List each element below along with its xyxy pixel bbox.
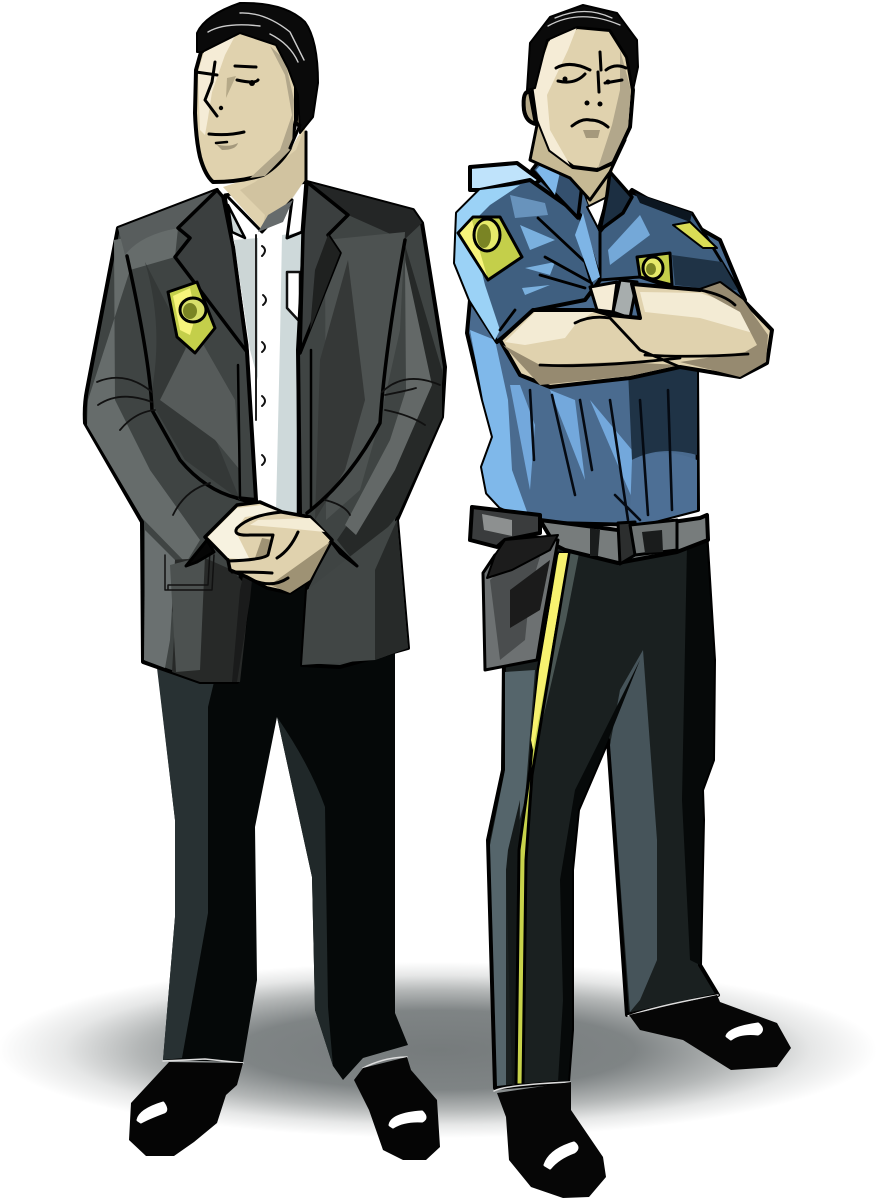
ear	[524, 92, 536, 124]
collar and neck	[223, 125, 307, 238]
badge	[168, 282, 215, 353]
hair	[197, 3, 318, 133]
figure: plainclothes officer in suit	[85, 3, 445, 1160]
watch	[613, 280, 637, 318]
shirt buttons	[262, 246, 266, 465]
hands	[205, 502, 332, 593]
collar and placket	[532, 157, 632, 282]
trousers	[157, 560, 408, 1080]
holster	[470, 507, 558, 670]
shirt upper: shoulders and sleeves	[455, 163, 745, 342]
shoes	[129, 1057, 440, 1160]
head	[195, 30, 296, 182]
shoes	[497, 995, 791, 1198]
face shading	[533, 27, 577, 165]
ear	[296, 84, 313, 128]
facial features	[556, 52, 626, 127]
arm patch: left shoulder	[458, 217, 522, 280]
belt	[540, 515, 708, 564]
head	[532, 27, 633, 170]
shoulder patch: right shoulder	[673, 222, 717, 248]
hair	[527, 5, 638, 90]
floor shadow	[0, 962, 877, 1138]
figure: uniformed officer	[455, 5, 791, 1198]
chest badge	[637, 253, 672, 285]
shirt	[225, 182, 307, 520]
crossed arms	[500, 282, 772, 387]
face shading	[198, 36, 235, 135]
trousers	[488, 530, 718, 1091]
shirt body	[467, 170, 745, 525]
jacket	[85, 182, 445, 682]
neck	[530, 120, 625, 200]
facial features	[196, 62, 258, 135]
